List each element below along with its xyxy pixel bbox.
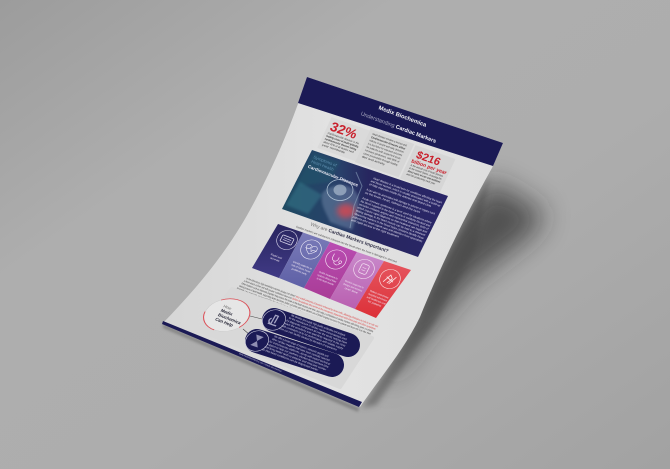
- pill 1: [258, 307, 351, 354]
- panel body text: Measuring markers in the blood helps clinicians identify those: [354, 212, 425, 240]
- pill 2 text: for immunoassay platforms, along with expert technical: [269, 339, 331, 366]
- callout heading: Medix: [220, 308, 234, 317]
- header band: [298, 77, 503, 166]
- stat block: $216 billion: is the annual cost of heart disease: [410, 163, 444, 178]
- caption 3: Guide treatment to: [318, 270, 339, 281]
- stat block: $216 billion: in the United States, including the: [409, 166, 443, 181]
- panel body text: It can also be associated with damage to arteries in organs such: [366, 188, 436, 216]
- icon ring 4: test tube: [350, 256, 378, 282]
- stat block: middle panel: [355, 129, 414, 177]
- callout heading: [214, 304, 248, 330]
- icon ring 5: clinician: [376, 266, 404, 292]
- stat block: middle panel: diet and activity: [361, 155, 386, 166]
- icon: microscope: [258, 307, 290, 333]
- icon: dna: [241, 328, 273, 354]
- caption 1: [268, 252, 283, 263]
- stat block: middle panel: Heart disease remains a serious and: [372, 132, 408, 147]
- body paragraph: a heart attack sooner and with greater confidence than ever before for patients who arrive at the emergency department with chest pain and other symptoms: [243, 279, 377, 331]
- paper sheet: [163, 77, 503, 407]
- caption 1: accurate: [269, 256, 281, 263]
- panel body text: the blood supplied to the heart muscle is suddenly blocked and: [360, 199, 431, 228]
- caption 5: for patients: [367, 299, 383, 308]
- image title: [307, 154, 364, 188]
- caption 1: Rapid and: [270, 252, 283, 260]
- caption 3: restore blood flow: [317, 273, 337, 284]
- heading: why are cardiac markers important: Cardiac markers are substances released into the blood when the heart is damaged or stressed: [295, 225, 398, 264]
- caption 2: problems early: [291, 267, 308, 276]
- stat block: middle panel: is a key factor for improved outcomes: [367, 142, 404, 157]
- column 4: [330, 252, 384, 309]
- caption 4: [341, 279, 365, 296]
- pill 1 text: from our own facility, backed by decades of experience: [278, 326, 338, 352]
- body paragraph: Reliable raw materials are essential for the development of accurate diagnostic tests and close collaboration with suppliers: [236, 286, 349, 331]
- pill 1 text: We develop and supply high-quality antibodies and antigens: [291, 313, 347, 337]
- column 3: [304, 242, 357, 299]
- callout heading: Biochemica: [217, 312, 243, 326]
- panel: how medix biochemica can help: [196, 289, 372, 387]
- pill 1 text: for the manufacture of cardiac marker immunoassays used: [288, 316, 348, 341]
- panel body text: and rapid access to the right treatment: [350, 218, 400, 239]
- stat block: middle panel: Cardiovascular diseases affect: [370, 135, 406, 151]
- panel body text: [350, 176, 443, 246]
- stat block: 32%: leading cause of death globally,: [326, 134, 360, 149]
- panel: cardiovascular diseases: [282, 150, 448, 257]
- panel body text: patients who need urgent care and attention from specialists: [352, 215, 424, 243]
- panel body text: Heart disease is a broad term for conditions affecting the heart: [373, 176, 443, 204]
- pill 1 text: with consistent lot-to-lot performance and reliable supply: [281, 324, 344, 351]
- body paragraph: In the laboratory, high-sensitivity troponin assays can detect very small amounts of protein released by heart cells, allowing clinicians to rule in or rule out: [246, 276, 379, 328]
- panel body text: which require rapid diagnosis so that treatment can begin and: [357, 205, 428, 234]
- column 2: [279, 232, 330, 288]
- image title: Heart Health: [310, 159, 335, 172]
- pill 2 text: other cardiac reagents that have been carefully selected: [271, 337, 331, 362]
- stat block: $216 billion: and lost productivity each year: [406, 172, 436, 186]
- footer band: [162, 321, 362, 407]
- pill 2: [241, 328, 334, 375]
- caption 3: to the heart muscle: [316, 276, 335, 287]
- callout heading: Can Help: [214, 317, 234, 328]
- page title: Understanding Cardiac Markers: [360, 111, 437, 145]
- strip: five reasons: [252, 224, 411, 318]
- icon ring 3: stethoscope: [322, 247, 350, 272]
- image title: Cardiovascular Diseases: [307, 164, 360, 188]
- pill 2 text: We offer a broad range of troponin, natriuretic peptide and: [274, 334, 330, 358]
- stat block: 32%: about 32% of all deaths each: [323, 140, 355, 154]
- logo: Medix Biochemica: [378, 105, 428, 129]
- pill 2 text: support to help our partners shorten development time: [266, 342, 330, 369]
- column 1: [252, 224, 303, 278]
- caption 4: Monitor response to: [344, 279, 365, 290]
- caption 4: over time: [344, 286, 359, 295]
- icon ring 1: monitor: [273, 228, 301, 252]
- stat block: 32%: year worldwide: [321, 143, 346, 154]
- caption 5: hospital admission: [368, 292, 389, 303]
- panel body text: lasting damage to the heart muscle can be kept to a minimum: [355, 209, 427, 237]
- paper shadow: [163, 175, 545, 412]
- connector: [243, 316, 262, 335]
- caption 2: risk of future heart: [291, 263, 311, 274]
- pill 1 text: reach the sensitivity and specificity required in the clinic: [283, 321, 347, 348]
- caption 4: therapy and recovery: [343, 282, 364, 293]
- pill 2 text: [261, 333, 334, 375]
- caption 5: and healthcare cost: [366, 295, 387, 306]
- stat block: 32%: Cardiovascular disease is the: [327, 131, 360, 146]
- pill 2 text: and bring better tests to patients and clinicians sooner: [264, 345, 327, 371]
- stat block: 32%: [317, 117, 370, 161]
- footer text: www.medixbiochemica.com | Medix Biochemica: [238, 352, 282, 373]
- body paragraph: Other markers such as natriuretic peptides help assess the strain on the heart muscle over time, and using a combination of cardiac markers with history gives a complete: [241, 281, 374, 333]
- column 5: [355, 261, 411, 318]
- body paragraph: clinical picture of heart health, supporting faster decisions, better outcomes and more efficient use of limited hospital resources for patients and those who look after them: [238, 284, 372, 336]
- icon ring 2: heart: [297, 237, 325, 262]
- stat block: 32%: cardiovascular disease taking: [324, 137, 357, 151]
- caption 5: Reduce unnecessary: [369, 289, 390, 300]
- pill 2 text: so that heart conditions can be diagnosed earlier: [261, 347, 319, 372]
- pill 1 text: [278, 312, 351, 354]
- panel body text: and blood vessels, which is usually associated with a build-up: [370, 179, 442, 208]
- panel body text: Acute coronary syndrome is a term used for situations where: [361, 196, 433, 225]
- heading: why are cardiac markers important: Why are Cardiac Markers Important?: [309, 222, 389, 255]
- stat block: middle panel: for patients with suspected acute: [366, 145, 402, 160]
- big number: $216: [414, 149, 442, 168]
- stat block: middle panel: millions of people and early detection: [369, 138, 405, 154]
- stat block: middle panel: cases preventable through healthy: [363, 151, 399, 167]
- caption 3: [315, 270, 339, 287]
- caption 5: [365, 289, 390, 309]
- caption 2: Identify patients at: [292, 260, 313, 271]
- stat block: middle panel: coronary syndromes, with 80% of: [364, 148, 400, 164]
- callout heading: How: [222, 304, 233, 311]
- stat block: $216 billion: billion per year: [410, 159, 448, 176]
- panel body text: includes unstable angina and myocardial infarction, both of: [358, 202, 430, 231]
- stat block: $216 billion: direct costs of care and medicine: [407, 169, 441, 184]
- image title: Symptoms of: [313, 154, 338, 168]
- caption 2: [289, 260, 313, 277]
- ring callout: [196, 294, 258, 336]
- image: heart and torso: [285, 153, 362, 230]
- big number: 32%: [328, 119, 360, 142]
- panel body text: as the brain, heart, kidneys and the eyes: [364, 191, 422, 214]
- pill 1 text: by diagnostic companies all over the world, helping them: [286, 318, 348, 345]
- stat block: $216 billion: [400, 145, 455, 192]
- panel body text: of fatty deposits inside the arteries and blood clots: [368, 182, 433, 208]
